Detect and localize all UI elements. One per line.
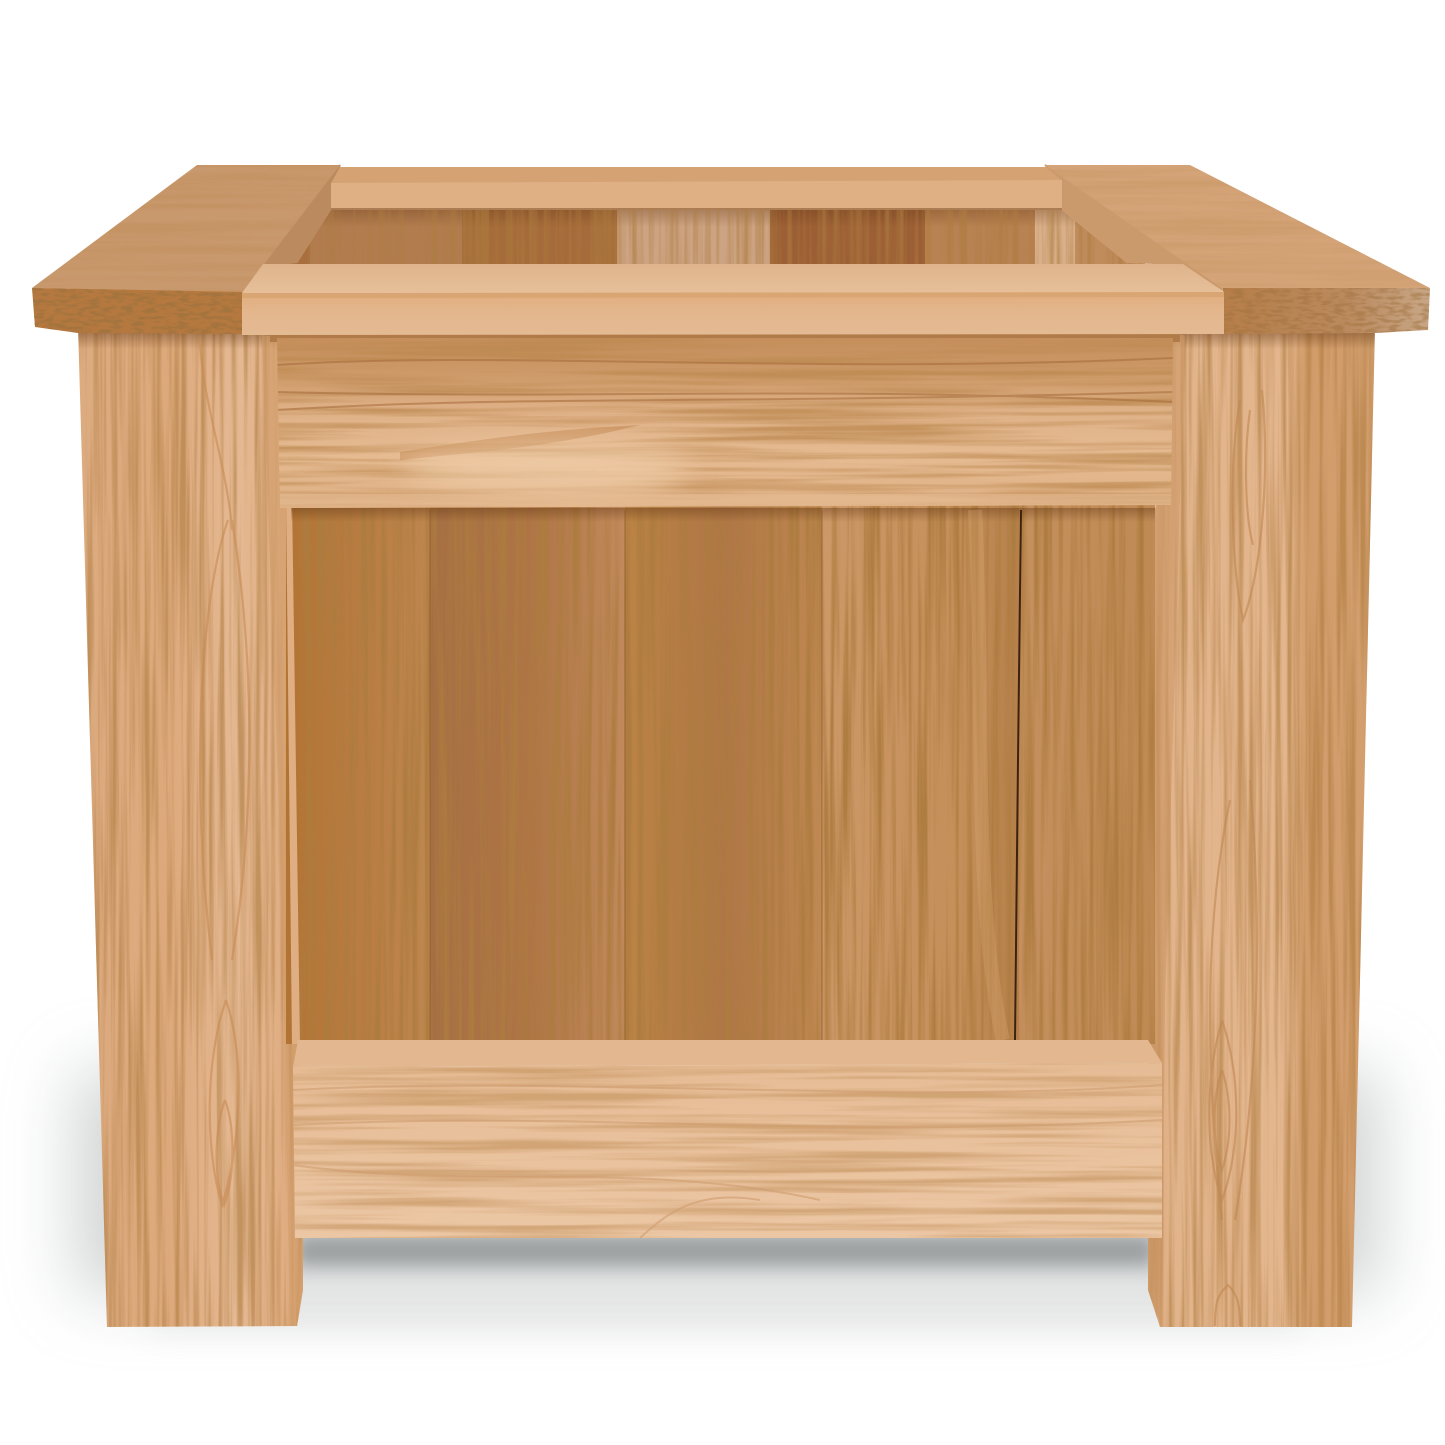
upper front horizontal panel (270, 328, 1180, 508)
lower front horizontal rail (293, 1040, 1163, 1239)
illustration: cedar planter box (32, 164, 1430, 1340)
top left board (32, 165, 342, 336)
top back rail (330, 167, 1063, 210)
centre vertical slats (286, 498, 1155, 1044)
floor shadow (75, 1070, 1380, 1330)
inner side walls of opening (263, 165, 1223, 290)
interior back panels (285, 205, 1145, 271)
top front rail (242, 264, 1224, 335)
top right board (1045, 165, 1431, 336)
left leg (78, 326, 304, 1329)
right leg (1148, 326, 1376, 1329)
